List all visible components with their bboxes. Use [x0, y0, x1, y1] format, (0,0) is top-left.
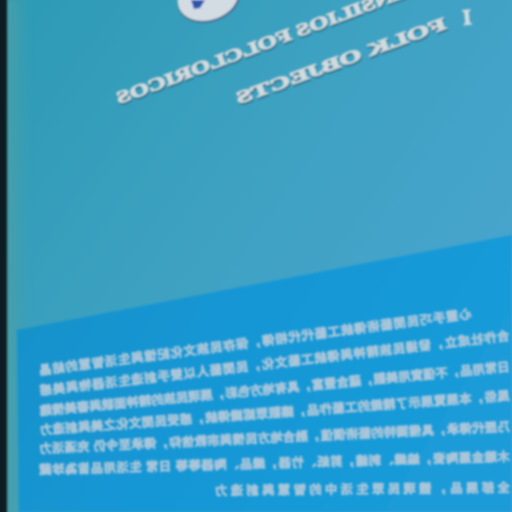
- icon: round logo: [171, 0, 247, 31]
- text block: mirrored Chinese paragraph: 日常用品，不僅實用美觀，蘊含豐富，具有地方色彩，展現民族的精神面貌與審美情趣: [38, 359, 510, 418]
- text block: mirrored Chinese paragraph: 風俗，本展覽展示了精緻的工藝作品，讓觀眾認識傳統，感受民間文化之美與創造力: [39, 388, 510, 437]
- text block: mirrored Chinese paragraph: 木雕金屬陶瓷，編織、刺繡，剪紙、竹器，織品、陶器等等 日常 生活用品皆為珍藏: [38, 449, 510, 477]
- text block: mirrored Chinese paragraph: 合作社成立，發揚民族精神與傳統工藝文化，民間藝人以雙手創造生活器物與美感: [38, 328, 510, 398]
- panel: lower blue text block: [17, 235, 512, 512]
- heading: mirrored title: FOLK OBJECTS: [233, 14, 448, 108]
- text block: mirrored Chinese paragraph: 全部展品，體現民眾生活中的智慧與創造力: [215, 480, 510, 498]
- heading: mirrored title: I: [461, 4, 473, 30]
- heading: mirrored title: FOLK OBJECTS: [234, 16, 449, 110]
- text block: mirrored Chinese paragraph: 心靈手巧民間藝術傳統工藝代代相傳，保存民族文化記憶與生活智慧的結晶: [38, 306, 472, 378]
- heading: mirrored title: [114, 0, 473, 110]
- left edge: lighter paper margin: [6, 0, 32, 512]
- text block: mirrored Chinese paragraph: [38, 306, 510, 498]
- text block: mirrored Chinese paragraph: 乃歷代傳承，具備獨特的藝術價值，融合地方民情與宗教信仰，傳承至今仍 充滿活力: [39, 419, 510, 456]
- left edge: dark strip: [0, 0, 7, 512]
